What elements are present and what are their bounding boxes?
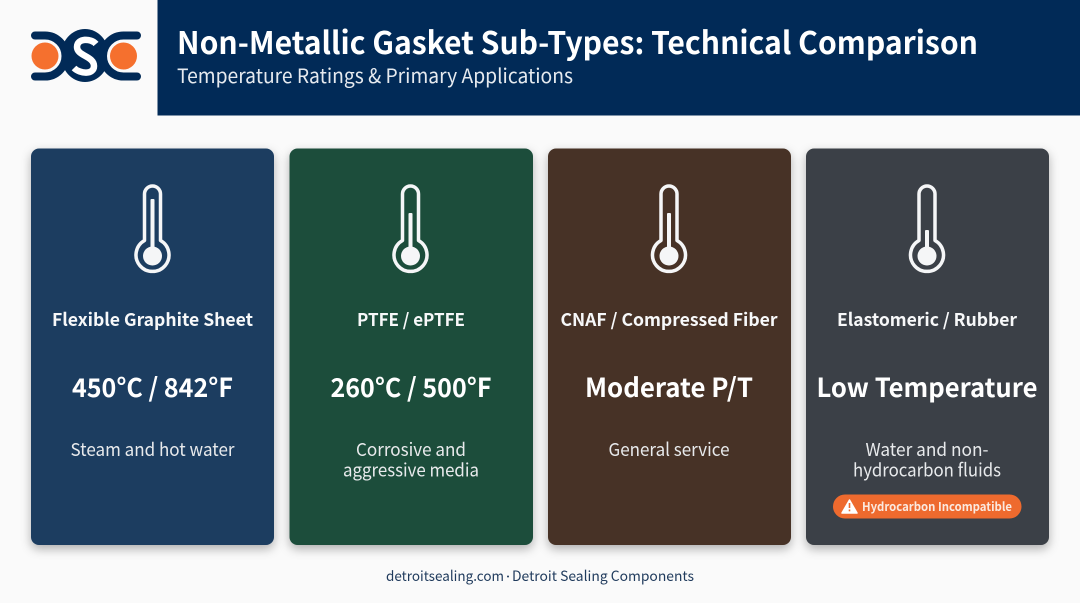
logo: right orange circle xyxy=(110,42,137,70)
temperature: 450°C / 842°F xyxy=(72,368,233,405)
application: General service xyxy=(608,436,730,462)
application: Corrosive and xyxy=(356,436,466,462)
application xyxy=(853,436,1001,482)
logo: left orange circle xyxy=(32,42,58,70)
name: PTFE / ePTFE xyxy=(357,307,465,332)
subtitle: Temperature Ratings & Primary Applications xyxy=(177,60,573,89)
application xyxy=(343,436,479,482)
logo: central navy blob xyxy=(61,29,109,82)
icon: thermometer high xyxy=(136,186,169,271)
logo: S letter xyxy=(74,40,96,73)
application: hydrocarbon fluids xyxy=(853,456,1001,482)
name: Elastomeric / Rubber xyxy=(837,307,1017,332)
title: Non-Metallic Gasket Sub-Types: Technical Comparison xyxy=(177,18,978,63)
icon: thermometer low xyxy=(910,186,943,271)
application: aggressive media xyxy=(343,456,479,482)
badge: hydrocarbon incompatible: Hydrocarbon Incompatible xyxy=(862,498,1012,515)
name: CNAF / Compressed Fiber xyxy=(560,307,778,332)
panel: ptfe xyxy=(290,148,533,545)
name: Flexible Graphite Sheet xyxy=(52,307,254,332)
panel: elastomeric xyxy=(806,148,1049,545)
footer: detroitsealing.com xyxy=(386,566,504,586)
icon: thermometer medium xyxy=(394,186,427,271)
application: Water and non- xyxy=(866,436,988,462)
logo: navy bands xyxy=(35,36,137,76)
badge: hydrocarbon incompatible xyxy=(833,494,1022,518)
logo xyxy=(28,29,140,82)
application: Steam and hot water xyxy=(70,436,235,462)
footer xyxy=(386,566,694,586)
header banner xyxy=(158,0,1080,116)
icon: thermometer moderate xyxy=(652,186,686,271)
rating: Moderate P/T xyxy=(585,368,753,405)
panel: flexible graphite sheet xyxy=(31,148,274,545)
logo: white gaps xyxy=(28,39,140,73)
temperature: 260°C / 500°F xyxy=(330,368,492,405)
icon: warning xyxy=(842,500,857,513)
footer: Detroit Sealing Components xyxy=(512,566,694,586)
panel: cnaf xyxy=(548,148,791,545)
rating: Low Temperature xyxy=(816,368,1038,405)
